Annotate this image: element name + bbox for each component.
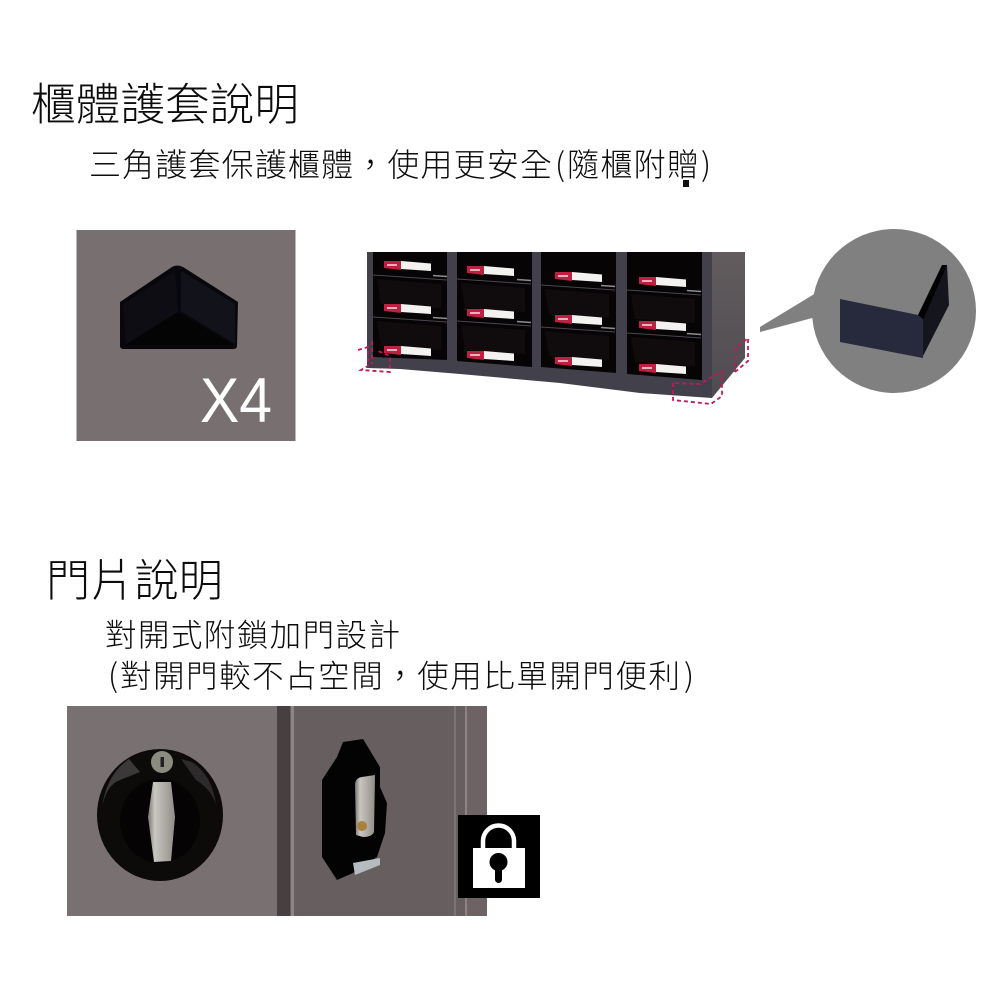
- icon: protector corner piece: [840, 265, 949, 358]
- title: cabinet protector: 櫃體護套說明: [31, 81, 299, 130]
- icon: door latch: [322, 739, 387, 880]
- label: X4: X4: [200, 366, 272, 436]
- panel: corner protector times four: [76, 230, 296, 441]
- dashed corner marker: left: [358, 341, 390, 372]
- drawer column 1: [373, 252, 447, 360]
- text: door description line 1: 對開式附鎖加門設計: [105, 617, 400, 653]
- subtitle: cabinet protector description: ): [701, 140, 711, 186]
- drawer column 4: [627, 252, 702, 380]
- text: door description line 2: 對開門較不占空間，使用比單開門便利: [120, 658, 680, 694]
- illustration: parts cabinet with drawers: [358, 252, 748, 404]
- callout: protector close-up: [760, 229, 976, 393]
- subtitle: cabinet protector description: (: [555, 140, 565, 186]
- icon: padlock: [458, 815, 540, 898]
- subtitle: cabinet protector description: [89, 140, 711, 187]
- drawer column 3: [541, 252, 616, 373]
- dashed corner marker: right: [673, 338, 748, 404]
- text: door description line 2: ): [684, 651, 694, 697]
- subtitle: cabinet protector description: 隨櫃附贈: [567, 147, 699, 183]
- cabinet side panel: [712, 252, 745, 398]
- text: door description line 2: (: [108, 651, 118, 697]
- icon: round lock knob: [97, 749, 223, 881]
- photo: door lock: [67, 706, 487, 916]
- drawer column 2: [457, 252, 532, 367]
- title: door description: 門片說明: [46, 557, 223, 606]
- icon: triangular corner protector: [120, 266, 238, 349]
- subtitle: cabinet protector description: 三角護套保護櫃體，使用更安全: [89, 147, 552, 183]
- cabinet body: [367, 252, 712, 398]
